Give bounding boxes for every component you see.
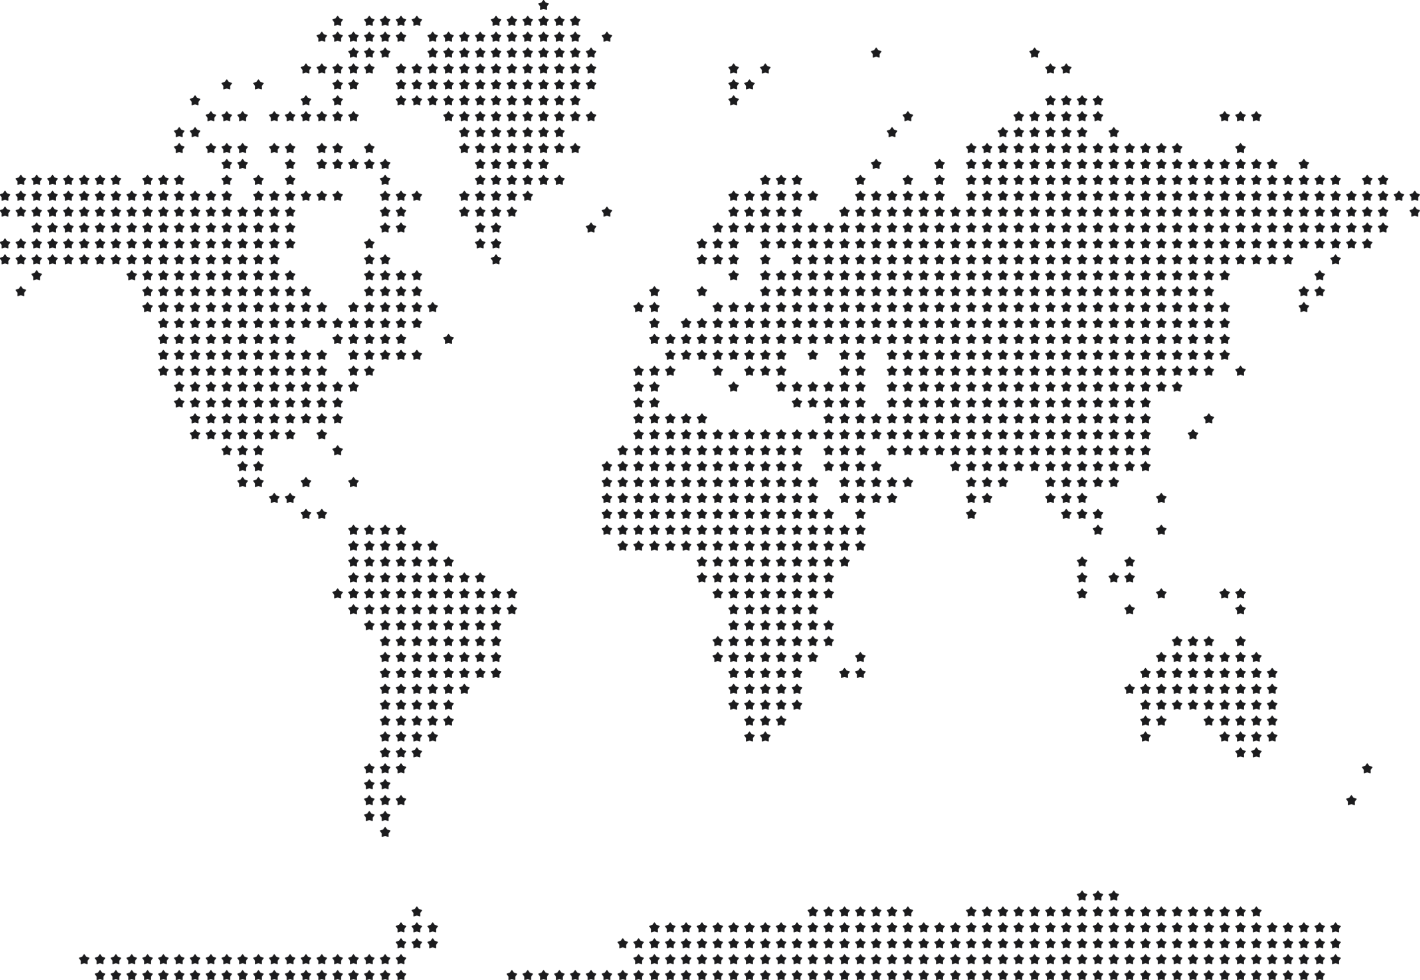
landmass: New Zealand: [1343, 760, 1375, 808]
landmass: Antarctica: [76, 888, 1343, 980]
landmass: South America: [330, 522, 520, 840]
landmass: Southeast Asian islands: [1074, 554, 1248, 617]
landmass: Eurasia: [631, 45, 1420, 538]
landmass: North America: [0, 13, 456, 522]
landmass: Greenland: [393, 0, 615, 267]
landmass: Australia: [1122, 633, 1280, 760]
landmass: Africa: [599, 411, 868, 745]
landmass: Iceland: [583, 204, 615, 236]
